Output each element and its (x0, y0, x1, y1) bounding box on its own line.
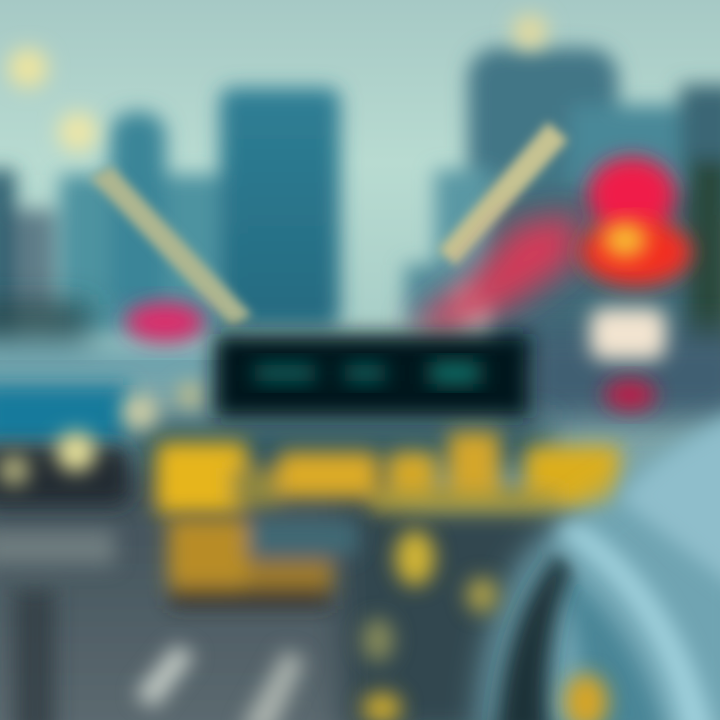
diagonal lamp arm left (90, 166, 252, 328)
dark sign panel (214, 334, 530, 418)
yellow headline band (156, 432, 620, 514)
right skyline buildings (405, 48, 720, 360)
red and orange neon sign (580, 157, 692, 286)
road lane markings (0, 530, 305, 720)
street lights (8, 14, 548, 152)
red neon sign trail (410, 212, 578, 335)
left car headlights (0, 383, 202, 486)
small yellow drips and lights (362, 530, 608, 720)
road (0, 420, 580, 720)
sign teal glyph smudges (255, 362, 480, 384)
left skyline buildings (0, 88, 340, 340)
red car lights right (604, 379, 656, 411)
foreground car dark contour (495, 522, 716, 720)
sky background (0, 0, 720, 360)
foreground curved car (480, 410, 720, 720)
yellow taxi body (168, 518, 358, 606)
diagonal lamp arm right (438, 122, 568, 266)
white sign right (590, 308, 666, 360)
left car (0, 445, 130, 505)
mid-ground street band (0, 305, 720, 420)
pink neon sign left (125, 302, 205, 342)
left blue car roof (0, 385, 130, 445)
